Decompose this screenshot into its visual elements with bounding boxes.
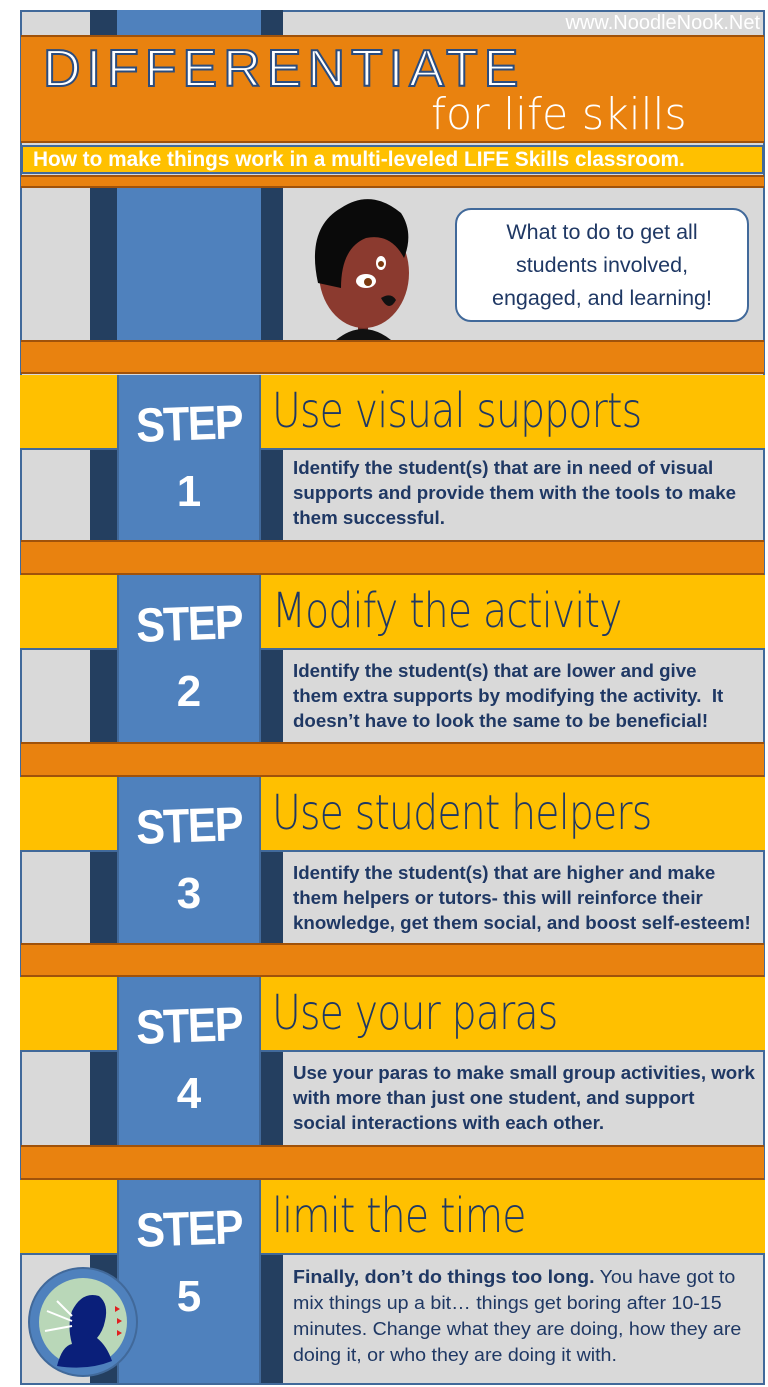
text: doing it, or who they are doing it with. bbox=[293, 1345, 617, 1365]
panel: step 4: STEP bbox=[135, 998, 243, 1055]
heading: Use your paras bbox=[272, 985, 557, 1041]
panel: step 2: STEP bbox=[135, 596, 243, 653]
speech bubble: students involved, bbox=[516, 253, 688, 277]
panel: step 2 bbox=[20, 575, 765, 742]
heading: Use student helpers bbox=[272, 785, 651, 841]
heading: Use visual supports bbox=[272, 383, 641, 439]
text bbox=[293, 863, 751, 933]
text: social interactions with each other. bbox=[293, 1113, 604, 1133]
intro panel bbox=[90, 188, 749, 340]
website label: www.NoodleNook.Net bbox=[565, 12, 760, 34]
text: doesn’t have to look the same to be beneficial! bbox=[293, 711, 708, 731]
subtitle bar: How to make things work in a multi-leveled LIFE Skills classroom. bbox=[33, 148, 685, 171]
text bbox=[293, 661, 723, 731]
text: them helpers or tutors- this will reinforce their bbox=[293, 888, 703, 908]
panel: step 4 bbox=[20, 977, 765, 1145]
panel: step 2: 2 bbox=[177, 667, 201, 716]
speech bubble bbox=[455, 208, 749, 322]
orange bar 1 bbox=[21, 340, 764, 374]
header panel bbox=[21, 35, 764, 143]
panel: step 4: 4 bbox=[177, 1069, 201, 1118]
heading: Modify the activity bbox=[272, 583, 622, 639]
text bbox=[293, 1267, 741, 1365]
text: them successful. bbox=[293, 508, 445, 528]
panel: step 3: 3 bbox=[177, 869, 201, 918]
icon: girl bbox=[314, 199, 409, 340]
panel: step 3 bbox=[20, 777, 765, 943]
text bbox=[293, 458, 736, 528]
panel: step 3: STEP bbox=[135, 798, 243, 855]
panel: step 5: STEP bbox=[135, 1201, 243, 1258]
text: knowledge, get them social, and boost self-esteem! bbox=[293, 913, 751, 933]
orange bar 3 bbox=[21, 742, 764, 777]
panel: step 1: STEP bbox=[135, 396, 243, 453]
orange bar 4 bbox=[21, 943, 764, 977]
title: DIFFERENTIATE bbox=[43, 40, 524, 98]
text: with more than just one student, and support bbox=[293, 1088, 694, 1108]
top column strip bbox=[90, 10, 283, 35]
icon: head profile circle bbox=[28, 1267, 138, 1377]
orange bar 5 bbox=[21, 1145, 764, 1180]
text: Identify the student(s) that are in need of visual bbox=[293, 458, 713, 478]
text: Identify the student(s) that are higher and make bbox=[293, 863, 715, 883]
heading: limit the time bbox=[272, 1188, 526, 1244]
text: supports and provide them with the tools to make bbox=[293, 483, 736, 503]
text: Use your paras to make small group activities, work bbox=[293, 1063, 755, 1083]
text: them extra supports by modifying the activity. It bbox=[293, 686, 723, 706]
text bbox=[293, 1063, 755, 1133]
panel: step 1: 1 bbox=[177, 467, 201, 516]
subtitle script: for life skills bbox=[431, 89, 687, 140]
text: minutes. Change what they are doing, how they are bbox=[293, 1319, 741, 1339]
text: Identify the student(s) that are lower and give bbox=[293, 661, 697, 681]
speech bubble: engaged, and learning! bbox=[492, 286, 712, 310]
panel: step 5: 5 bbox=[177, 1272, 201, 1321]
panel: step 5 bbox=[20, 1180, 765, 1383]
speech bubble: What to do to get all bbox=[506, 220, 698, 244]
text: mix things up a bit… things get boring after 10-15 bbox=[293, 1293, 722, 1313]
panel: step 1 bbox=[20, 375, 765, 540]
subtitle bar bbox=[21, 145, 764, 174]
thin orange bar bbox=[21, 175, 764, 188]
text: Finally, don’t do things too long. You have got to bbox=[293, 1267, 735, 1287]
orange bar 2 bbox=[21, 540, 764, 575]
